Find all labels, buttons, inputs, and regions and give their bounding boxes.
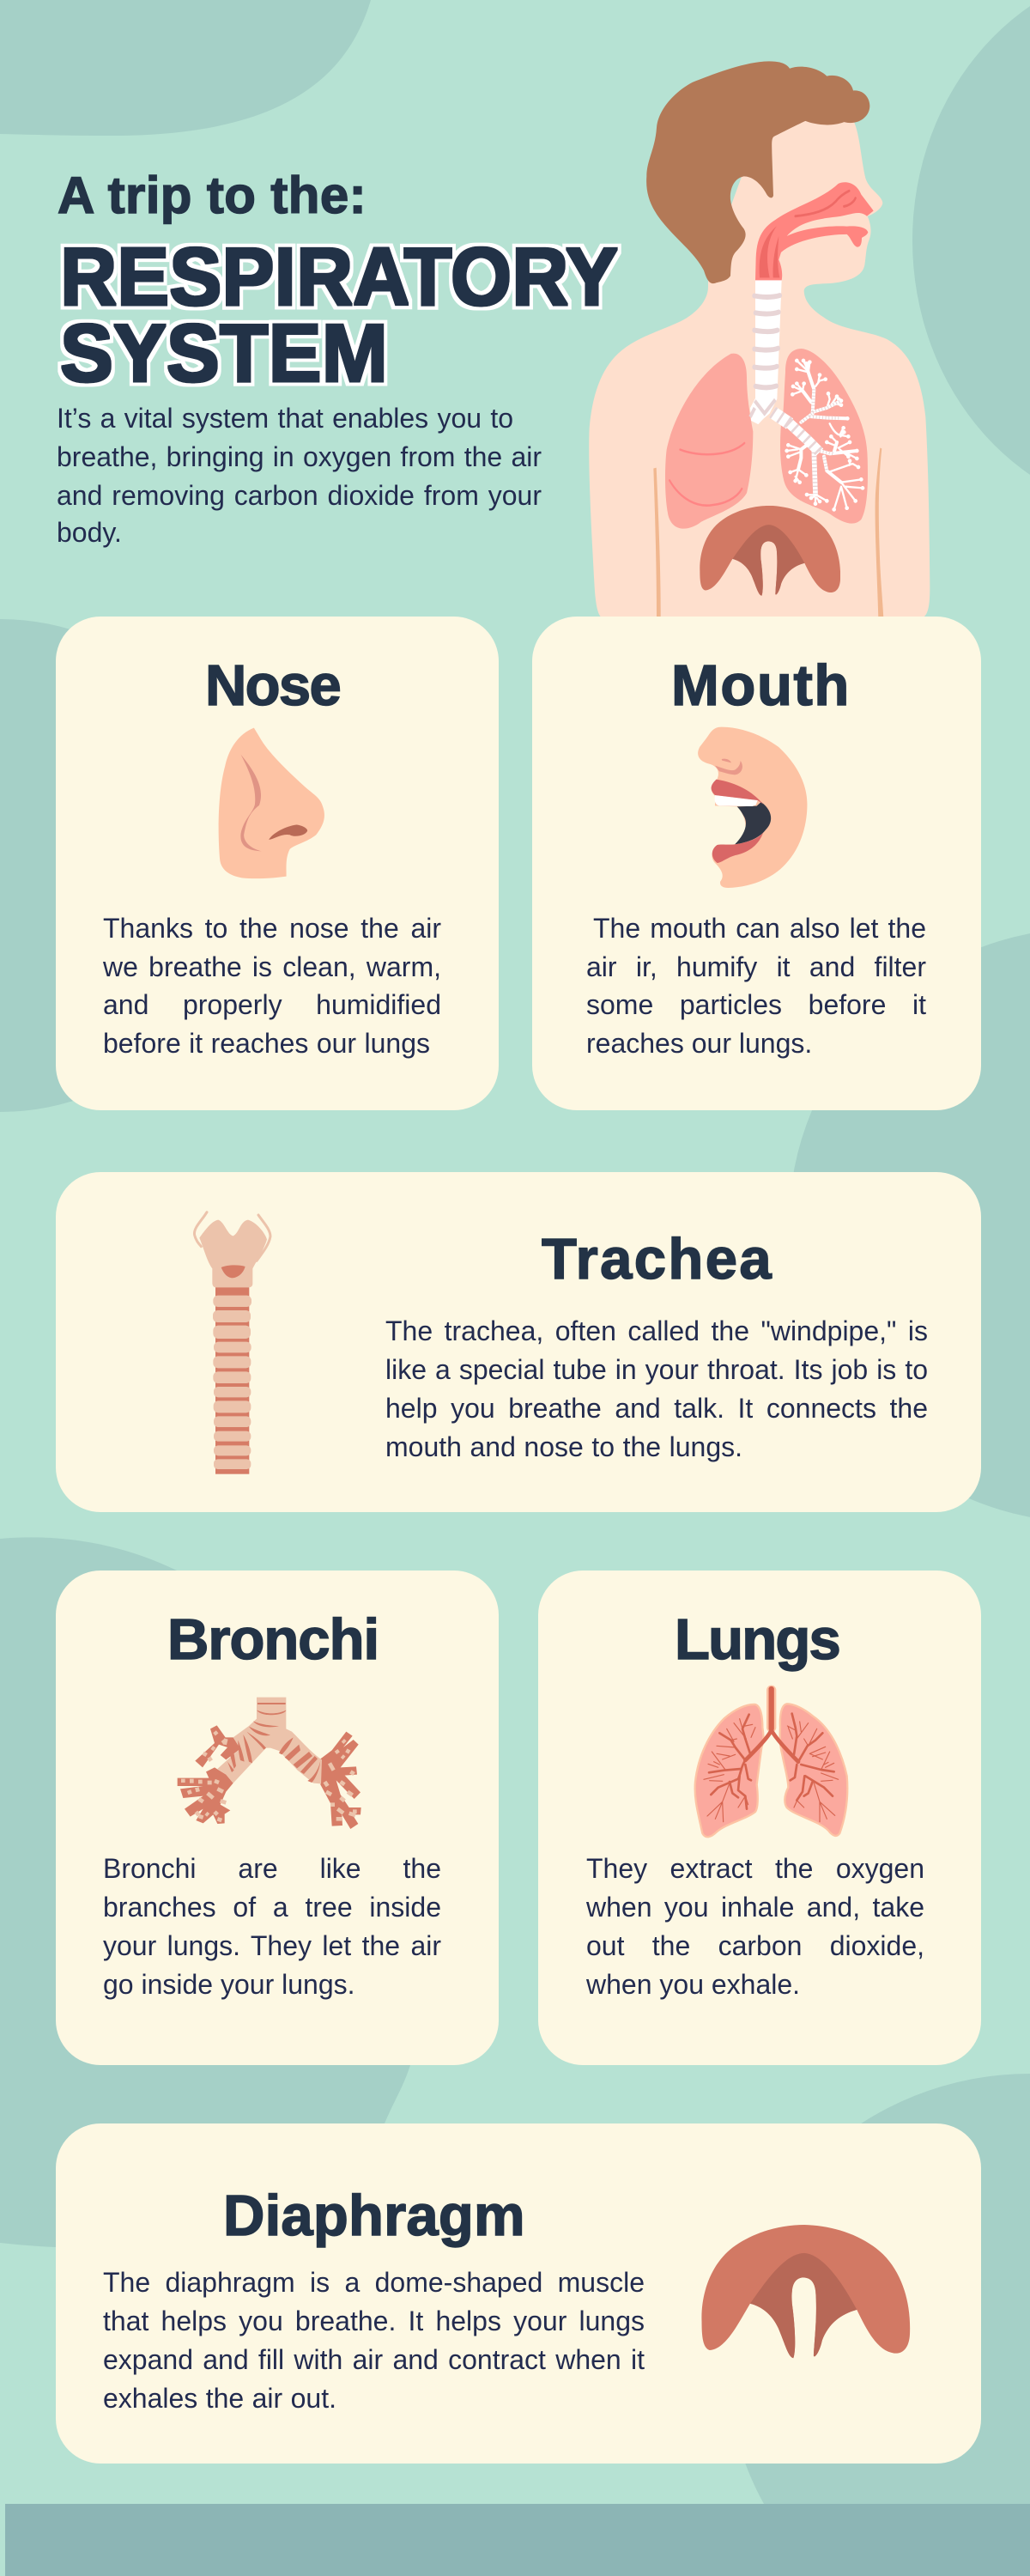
text: trachea: like a special tube in your throat. Its job is to — [385, 1354, 928, 1385]
icon: lungs — [694, 1685, 848, 1838]
text: mouth: air ir, humify it and filter — [586, 951, 926, 982]
text: bronchi: your lungs. They let the air — [103, 1930, 441, 1961]
intro text — [57, 403, 542, 548]
panel: bronchi — [56, 1571, 499, 2065]
text: mouth — [586, 913, 926, 1059]
text: lungs: They extract the oxygen — [586, 1853, 924, 1884]
icon: trachea — [193, 1211, 271, 1474]
text: diaphragm — [103, 2267, 645, 2414]
panel: diaphragm — [56, 2123, 981, 2464]
text: bronchi: go inside your lungs. — [103, 1969, 355, 2000]
text: nose: before it reaches our lungs — [103, 1028, 430, 1059]
panel: lungs — [538, 1571, 981, 2065]
left lung — [665, 354, 753, 529]
text: lungs — [586, 1853, 924, 2000]
text: bronchi: branches of a tree inside — [103, 1892, 441, 1923]
intro text: body. — [57, 517, 122, 548]
text: mouth: some particles before it — [586, 989, 926, 1020]
text: trachea: The trachea, often called the "windpipe," is — [385, 1315, 928, 1346]
heading: bronchi: Bronchi — [167, 1607, 379, 1672]
illustration: human respiratory system — [589, 61, 930, 617]
title: Respiratory System — [58, 231, 621, 399]
text: nose: we breathe is clean, warm, — [103, 951, 441, 982]
text: diaphragm: expand and fill with air and contract when it — [103, 2344, 645, 2375]
heading: nose: Nose — [205, 653, 340, 718]
text: lungs: when you inhale and, take — [586, 1892, 924, 1923]
text: diaphragm: The diaphragm is a dome-shaped muscle — [103, 2267, 645, 2298]
trachea — [750, 280, 782, 424]
heading: diaphragm: Diaphragm — [223, 2184, 525, 2248]
text: trachea: mouth and nose to the lungs. — [385, 1431, 742, 1462]
intro text: breathe, bringing in oxygen from the air — [57, 441, 542, 472]
panel: trachea — [56, 1172, 981, 1512]
text: mouth: reaches our lungs. — [586, 1028, 812, 1059]
icon: diaphragm — [701, 2225, 910, 2358]
text: nose: and properly humidified — [103, 989, 441, 1020]
panel: nose — [56, 617, 499, 1110]
text: bronchi: Bronchi are like the — [103, 1853, 441, 1884]
text: diaphragm: that helps you breathe. It helps your lungs — [103, 2306, 645, 2336]
intro text: and removing carbon dioxide from your — [57, 480, 542, 511]
text: bronchi — [103, 1853, 441, 2000]
right lung with bronchial tree — [772, 349, 868, 524]
footer band — [5, 2504, 1030, 2576]
heading: trachea: Trachea — [542, 1227, 773, 1291]
text: lungs: out the carbon dioxide, — [586, 1930, 924, 1961]
panel: mouth — [532, 617, 981, 1110]
diaphragm — [700, 506, 840, 596]
title: A trip to the: A trip to the: — [58, 167, 367, 224]
text: mouth: The mouth can also let the — [593, 913, 926, 944]
icon: bronchi — [177, 1697, 361, 1829]
title: Respiratory System: SYSTEM — [60, 307, 388, 399]
text: trachea — [385, 1315, 928, 1462]
icon: nose — [218, 728, 324, 879]
title heading — [58, 167, 621, 399]
text: diaphragm: exhales the air out. — [103, 2383, 336, 2414]
ribs side lines — [653, 447, 883, 618]
heading: lungs: Lungs — [675, 1607, 839, 1672]
text: nose — [103, 913, 441, 1059]
text: lungs: when you exhale. — [586, 1969, 800, 2000]
icon: mouth — [698, 726, 807, 888]
title: Respiratory System: RESPIRATORY — [60, 231, 618, 323]
text: trachea: help you breathe and talk. It connects the — [385, 1393, 928, 1424]
airway: nose and mouth passage — [755, 182, 874, 280]
intro text: It’s a vital system that enables you to — [57, 403, 513, 434]
heading: mouth: Mouth — [671, 653, 851, 718]
text: nose: Thanks to the nose the air — [103, 913, 441, 944]
